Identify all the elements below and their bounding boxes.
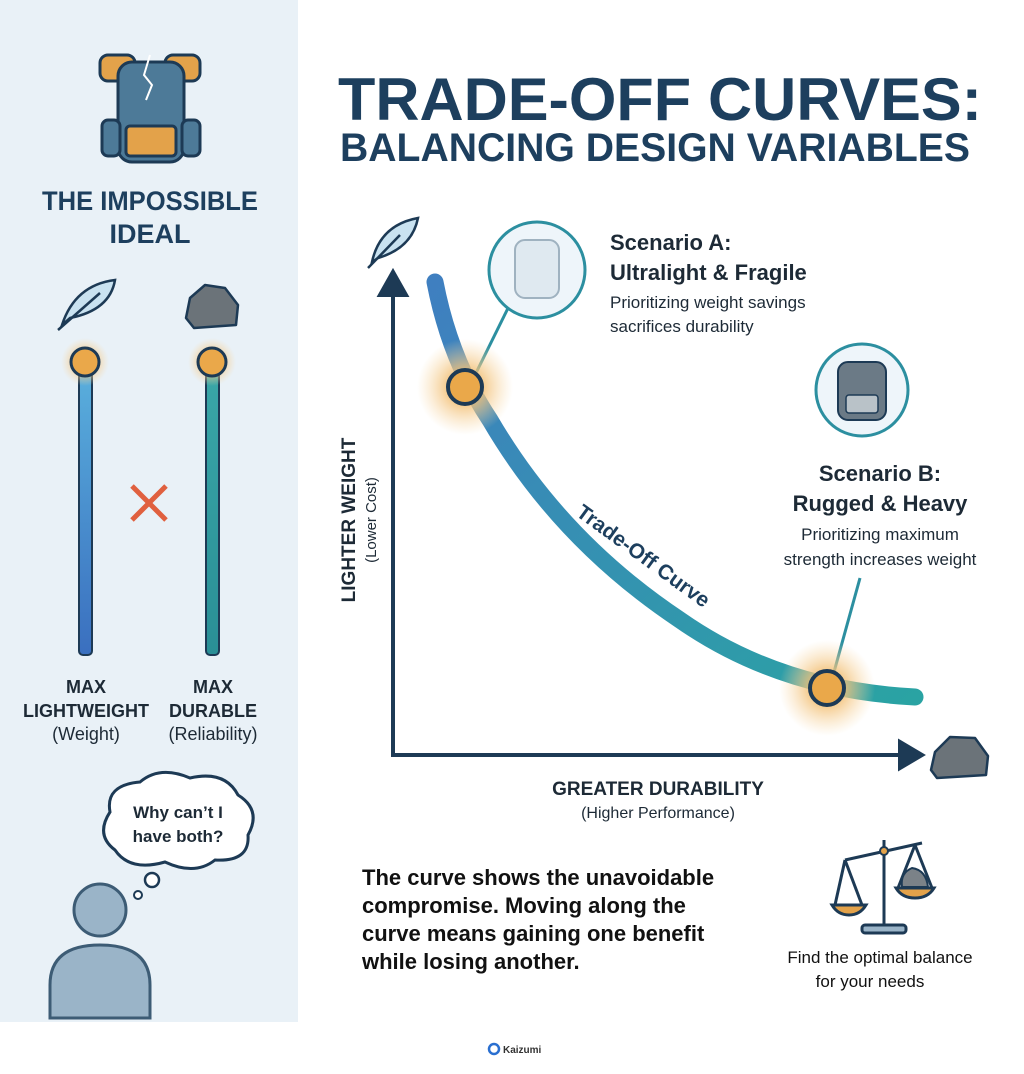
icon: person [50,884,150,1018]
title [338,66,982,170]
point B [779,344,908,736]
label: max durable: DURABLE [169,701,257,721]
label: max durable: (Reliability) [168,724,258,744]
label: max lightweight [23,677,149,744]
axis label: y: (Lower Cost) [363,477,380,563]
heading: the impossible ideal: THE IMPOSSIBLE [42,186,258,216]
scenario B text: Prioritizing maximum [801,525,959,544]
explanation text: while losing another. [361,949,580,974]
scenario A text: sacrifices durability [610,317,754,336]
curve label: Trade-Off Curve [572,500,714,612]
caption: optimal balance: Find the optimal balance [787,948,973,967]
bar: max durable [188,338,236,655]
scenario B text [784,461,977,569]
icon: rock axis [931,737,988,778]
thought bubble [104,772,253,899]
scenario B text: strength increases weight [784,550,977,569]
label: max lightweight: MAX [66,677,106,697]
footer logo: Kaizumi [503,1045,542,1056]
axis label: x: GREATER DURABILITY [552,779,764,800]
scenario A text: Prioritizing weight savings [610,293,806,312]
caption: optimal balance [787,948,973,991]
scenario B text: Rugged & Heavy [793,491,968,516]
caption: optimal balance: for your needs [816,972,924,991]
axis label: x: (Higher Performance) [581,805,735,822]
label: max durable [168,677,258,744]
explanation text: compromise. Moving along the [362,893,686,918]
scenario A text [610,230,807,336]
axis label: y [339,437,380,602]
label: max lightweight: LIGHTWEIGHT [23,701,149,721]
axes [380,272,922,768]
title: BALANCING DESIGN VARIABLES [340,126,970,170]
axis label: x [552,779,764,822]
chart: trade-off curve [339,218,988,822]
scenario A text: Scenario A: [610,230,731,255]
scenario B text: Scenario B: [819,461,941,486]
explanation text: The curve shows the unavoidable [362,865,714,890]
bar: max lightweight [61,338,109,655]
scenario A text: Ultralight & Fragile [610,260,807,285]
label: max durable: MAX [193,677,233,697]
icon: broken backpack [100,55,200,162]
panel: impossible ideal: IDEAL [110,219,190,249]
icon: feather [58,280,115,330]
icon: red x [132,486,166,520]
panel: impossible ideal [0,0,298,1022]
footer logo [489,1044,542,1056]
point A [417,222,585,435]
label: max lightweight: (Weight) [52,724,120,744]
explanation text [361,865,714,974]
icon: balance scale [832,840,934,933]
curve [435,282,915,697]
axis label: y: LIGHTER WEIGHT [339,437,360,602]
icon: rock [186,285,238,328]
explanation text: curve means gaining one benefit [362,921,705,946]
thought bubble: have both? [133,827,223,846]
icon: feather axis [368,218,418,268]
title: TRADE-OFF CURVES: [338,66,982,133]
thought bubble: Why can’t I [133,803,223,822]
